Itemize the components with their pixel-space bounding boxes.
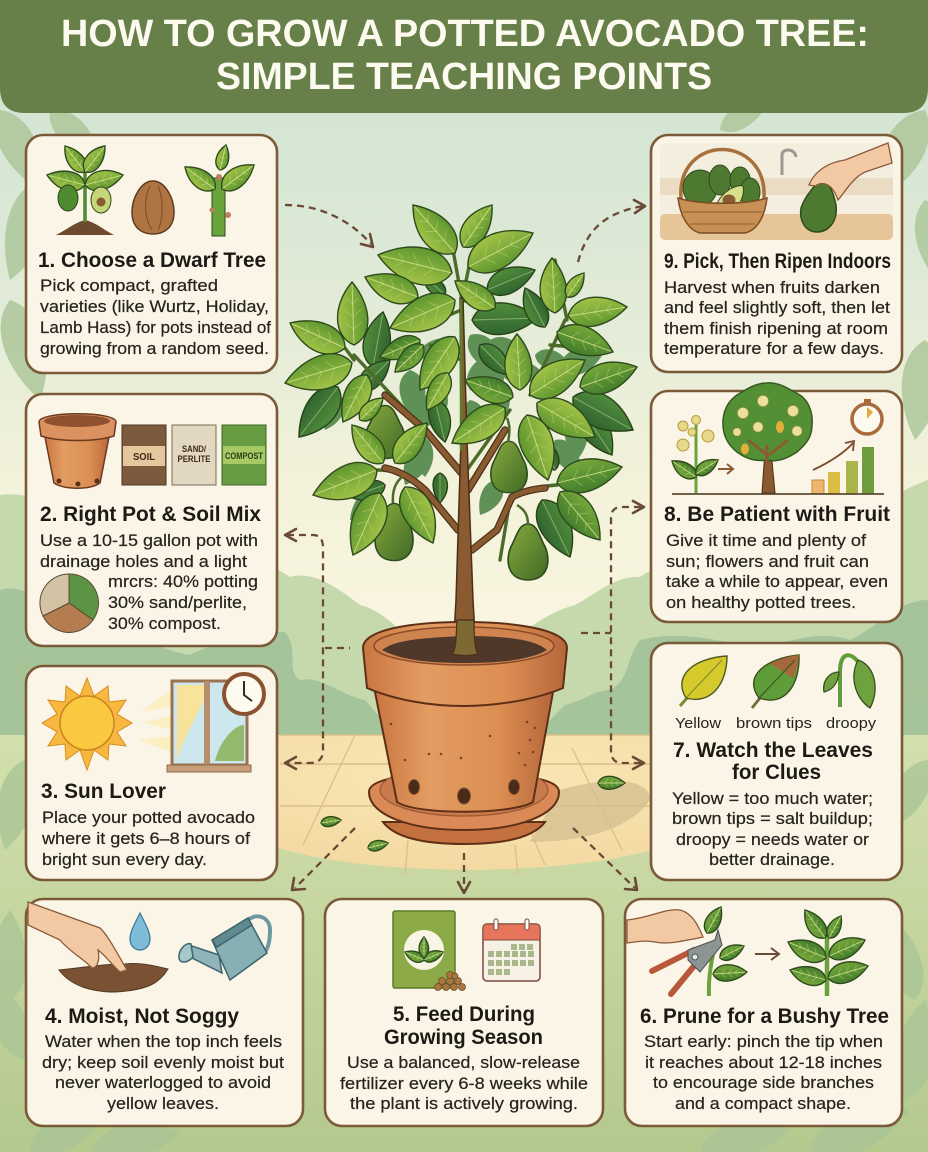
icon: fertilizer bag bbox=[393, 911, 455, 988]
near bushes bbox=[0, 588, 928, 740]
heading: 5. Feed During bbox=[393, 1003, 535, 1026]
leaf captions: Yellow bbox=[675, 715, 721, 732]
panel: step 8 be patient with fruit bbox=[651, 383, 902, 622]
icon: soil bag: SOIL bbox=[133, 452, 155, 463]
body text: Place your potted avocado bbox=[42, 809, 255, 827]
body text: and a compact shape. bbox=[675, 1095, 851, 1113]
ground bbox=[0, 735, 928, 1152]
icon: terracotta pot bbox=[39, 414, 116, 488]
body text bbox=[40, 277, 271, 358]
pot rim bbox=[363, 622, 567, 706]
body text: Use a balanced, slow-release bbox=[347, 1054, 580, 1072]
icon: leaf with brown tip bbox=[752, 655, 799, 708]
body text: droopy = needs water or bbox=[676, 831, 870, 849]
heading: 4. Moist, Not Soggy bbox=[45, 1005, 239, 1028]
soil bbox=[374, 620, 554, 665]
icon: sand perlite bag: PERLITE bbox=[178, 454, 210, 464]
body text bbox=[672, 790, 873, 869]
icon: pruning shears bbox=[652, 930, 722, 994]
panel: step 2 right pot and soil mix bbox=[26, 394, 277, 646]
heading: for Clues bbox=[732, 761, 821, 784]
icon: sand perlite bag: SAND/ bbox=[182, 444, 206, 454]
icon: small arrow bbox=[718, 464, 733, 474]
body text: where it gets 6–8 hours of bbox=[41, 830, 250, 848]
ground line bbox=[672, 493, 884, 495]
fallen leaves bbox=[320, 776, 625, 853]
heading: 3. Sun Lover bbox=[41, 780, 166, 803]
body text: bright sun every day. bbox=[42, 851, 207, 869]
icon: seedling with avocado bbox=[45, 141, 125, 235]
panel: step 6 prune for a bushy tree bbox=[625, 899, 902, 1126]
body text: sun; flowers and fruit can bbox=[666, 553, 869, 571]
icon: grafted stem bbox=[180, 144, 260, 236]
icon: compost bag: COMPOST bbox=[225, 451, 263, 461]
icon: light rays bbox=[138, 690, 172, 752]
speckles bbox=[390, 721, 536, 766]
body text: take a while to appear, even bbox=[666, 573, 888, 591]
far bushes bbox=[0, 480, 928, 740]
icon: branch being pruned bbox=[701, 904, 747, 996]
title: SIMPLE TEACHING POINTS bbox=[216, 56, 712, 98]
icon: fruiting tree bbox=[723, 383, 812, 493]
leaf captions: droopy bbox=[826, 715, 877, 732]
body text: Start early: pinch the tip when bbox=[644, 1033, 883, 1051]
body text: Lamb Hass) for pots instead of bbox=[40, 319, 271, 337]
panel: step 4 moist not soggy bbox=[26, 899, 303, 1126]
heading bbox=[384, 1003, 543, 1049]
body text: it reaches about 12-18 inches bbox=[645, 1054, 882, 1072]
body text: fertilizer every 6-8 weeks while bbox=[340, 1075, 588, 1093]
arrow: tree to step 9 bbox=[578, 200, 645, 262]
body text: dry; keep soil evenly moist but bbox=[42, 1054, 284, 1072]
trunk and branches bbox=[345, 250, 610, 652]
central avocado tree illustration bbox=[280, 195, 642, 652]
front leaves bbox=[280, 195, 642, 562]
arrow: tree to steps 7 and 8 bbox=[581, 501, 644, 769]
icon: soil bag bbox=[122, 425, 166, 485]
icon: bushy plant bbox=[784, 905, 871, 996]
icon: fertilizer pellets bbox=[434, 972, 466, 990]
icon: yellow leaf bbox=[680, 656, 727, 706]
body text bbox=[40, 532, 258, 633]
body text: yellow leaves. bbox=[107, 1095, 219, 1113]
body text: Water when the top inch feels bbox=[45, 1033, 282, 1051]
body text: mrcrs: 40% potting bbox=[108, 573, 258, 591]
panel: step 1 choose a dwarf tree bbox=[26, 135, 277, 373]
title: HOW TO GROW A POTTED AVOCADO TREE: bbox=[61, 13, 869, 55]
icon: sand perlite bag bbox=[172, 425, 216, 485]
heading: 6. Prune for a Bushy Tree bbox=[640, 1005, 889, 1028]
heading: 8. Be Patient with Fruit bbox=[664, 503, 890, 526]
body text bbox=[644, 1033, 883, 1113]
chart: growth bars bbox=[812, 441, 874, 494]
icon: hand bbox=[627, 910, 703, 943]
body text bbox=[666, 532, 888, 612]
body text: Yellow = too much water; bbox=[672, 790, 873, 808]
arrow: tree to step 6 bbox=[573, 828, 637, 890]
arrow: tree to step 4 bbox=[292, 828, 355, 890]
heading bbox=[673, 739, 873, 784]
body text: Use a 10-15 gallon pot with bbox=[40, 532, 258, 550]
back foliage bbox=[287, 258, 641, 564]
body text: 30% compost. bbox=[108, 615, 221, 633]
leaf captions bbox=[675, 715, 877, 732]
body text bbox=[42, 1033, 284, 1113]
body text: temperature for a few days. bbox=[664, 340, 884, 358]
heading: 2. Right Pot & Soil Mix bbox=[40, 503, 261, 526]
patio tiles bbox=[205, 735, 760, 875]
heading: 1. Choose a Dwarf Tree bbox=[38, 249, 266, 272]
chart: soil mix pie bbox=[40, 574, 99, 632]
body text: on healthy potted trees. bbox=[666, 594, 856, 612]
arrow: tree to steps 2 and 3 bbox=[285, 529, 350, 769]
body text: brown tips = salt buildup; bbox=[672, 810, 873, 828]
panel: step 9 pick then ripen indoors bbox=[651, 135, 902, 372]
panel: step 7 watch the leaves for clues bbox=[651, 643, 902, 880]
body text: better drainage. bbox=[709, 851, 835, 869]
body text: growing from a random seed. bbox=[40, 340, 269, 358]
title bbox=[61, 13, 869, 98]
icon: water drop bbox=[130, 913, 150, 950]
icon: compost bag bbox=[222, 425, 266, 485]
panel: step 3 sun lover bbox=[26, 666, 277, 880]
icon: soil mound bbox=[59, 963, 168, 992]
arrow: tree to step 1 bbox=[285, 205, 373, 247]
body text: the plant is actively growing. bbox=[350, 1095, 578, 1113]
body text: Give it time and plenty of bbox=[666, 532, 866, 550]
pot shadow bbox=[530, 781, 650, 842]
icon: avocado seed bbox=[132, 181, 174, 234]
leaf captions: brown tips bbox=[736, 715, 812, 732]
icon: droopy plant bbox=[824, 655, 875, 708]
panel: step 5 feed during growing season bbox=[325, 899, 603, 1126]
body text: drainage holes and a light bbox=[40, 553, 247, 571]
body text bbox=[664, 279, 890, 358]
icon: flowering sprig bbox=[668, 416, 721, 493]
body text: 30% sand/perlite, bbox=[108, 594, 247, 612]
pot body bbox=[375, 692, 553, 812]
icon: watering can bbox=[179, 916, 270, 980]
icon: arrow bbox=[755, 948, 779, 960]
body text: them finish ripening at room bbox=[664, 320, 888, 338]
body text: to encourage side branches bbox=[653, 1074, 874, 1092]
body text: and feel slightly soft, then let bbox=[664, 299, 890, 317]
kitchen scene bbox=[660, 143, 893, 240]
icon: avocado basket bbox=[678, 150, 767, 233]
body text: Pick compact, grafted bbox=[40, 277, 218, 295]
saucer bbox=[369, 764, 559, 844]
icon: clock bbox=[224, 674, 264, 714]
arrow: tree to step 5 bbox=[458, 853, 470, 893]
body text: Harvest when fruits darken bbox=[664, 279, 880, 297]
avocado fruits bbox=[365, 405, 548, 580]
body text: varieties (like Wurtz, Holiday, bbox=[40, 298, 269, 316]
icon: stopwatch bbox=[852, 399, 882, 434]
icon: hand testing soil bbox=[28, 902, 127, 972]
heading: 7. Watch the Leaves bbox=[673, 739, 873, 762]
terracotta pot with saucer bbox=[363, 620, 567, 844]
icon: calendar bbox=[483, 919, 540, 981]
icon: window bbox=[167, 681, 251, 772]
icon: hand picking avocado bbox=[801, 143, 892, 232]
header banner bbox=[0, 0, 928, 113]
body text bbox=[340, 1054, 588, 1113]
icon: sun bbox=[42, 678, 132, 770]
body text: never waterlogged to avoid bbox=[55, 1074, 271, 1092]
heading: Growing Season bbox=[384, 1026, 543, 1049]
body text bbox=[41, 809, 255, 869]
drainage holes bbox=[408, 780, 520, 804]
